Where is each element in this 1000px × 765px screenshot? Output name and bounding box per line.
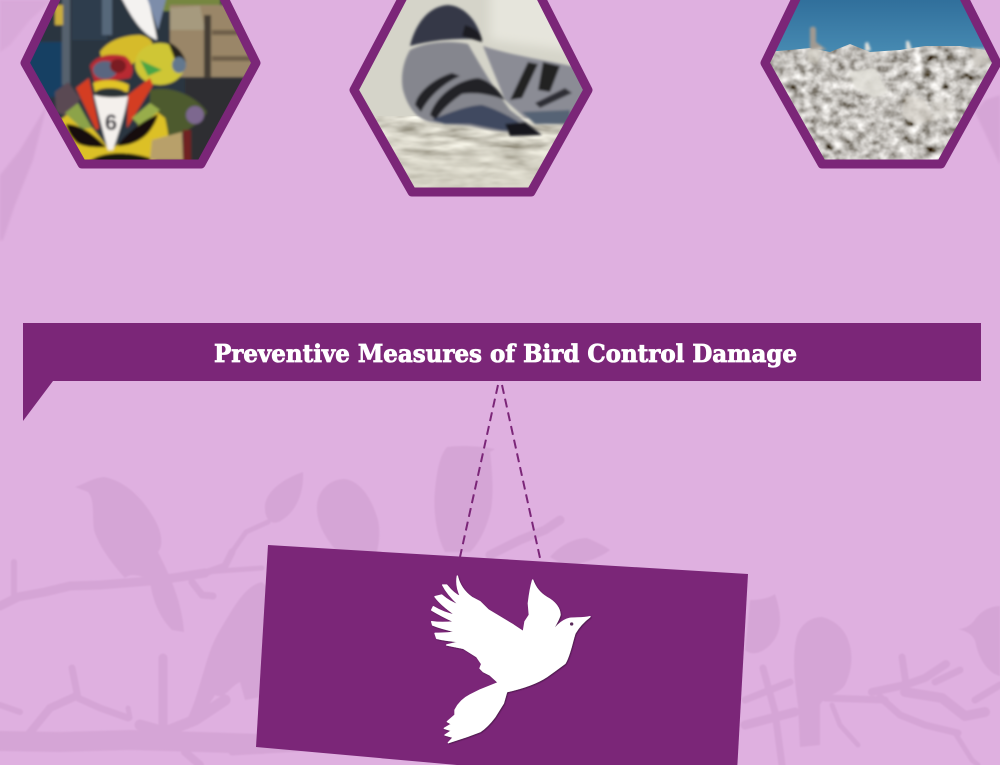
hanging card with dove icon bbox=[256, 545, 748, 765]
dashed hanging strings bbox=[460, 385, 540, 558]
branches drawn as strokes bbox=[0, 520, 1000, 765]
bird silhouettes and leaves bbox=[75, 446, 1000, 747]
hexagon frame: pelicans bbox=[765, 0, 997, 164]
large bird behind card bbox=[181, 582, 280, 730]
bird right of card bbox=[794, 617, 851, 747]
leaf behind the card bbox=[550, 538, 610, 566]
decorative feather silhouette: top right bbox=[975, 95, 1000, 165]
plump bird behind dashed lines bbox=[434, 446, 495, 552]
leaf on upper left branch bbox=[265, 472, 303, 523]
pigeon photo content bbox=[359, 0, 583, 188]
plump bird left of centre bbox=[317, 479, 379, 555]
motorcycle photo content bbox=[30, 0, 251, 160]
racing number: 6 bbox=[105, 110, 117, 135]
lower hanging strings bbox=[484, 762, 497, 765]
heading text: Preventive Measures of Bird Control Damage bbox=[214, 339, 797, 368]
hexagon frame: motorcycle bbox=[25, 0, 256, 164]
dove eye bbox=[570, 622, 573, 626]
hexagon photo: pigeon on ledge bbox=[345, 0, 600, 200]
hexagon photo: pelican colony on rocks bbox=[760, 0, 1000, 170]
hexagon photo: motorcycle racer bbox=[20, 0, 260, 168]
background silhouettes: birds on branches bbox=[0, 446, 1000, 765]
leaf on right of card bbox=[745, 594, 780, 653]
tilted card bbox=[256, 545, 748, 765]
icon: white dove bbox=[432, 576, 590, 743]
bird with long tail bbox=[75, 477, 184, 632]
decorative feather silhouette: top left bbox=[0, 0, 52, 241]
section heading ribbon bbox=[23, 323, 981, 421]
ribbon shape bbox=[23, 323, 981, 421]
bird at right edge bbox=[958, 606, 1000, 676]
hexagon frame: pigeon bbox=[354, 0, 588, 192]
pelican photo content bbox=[770, 0, 992, 160]
